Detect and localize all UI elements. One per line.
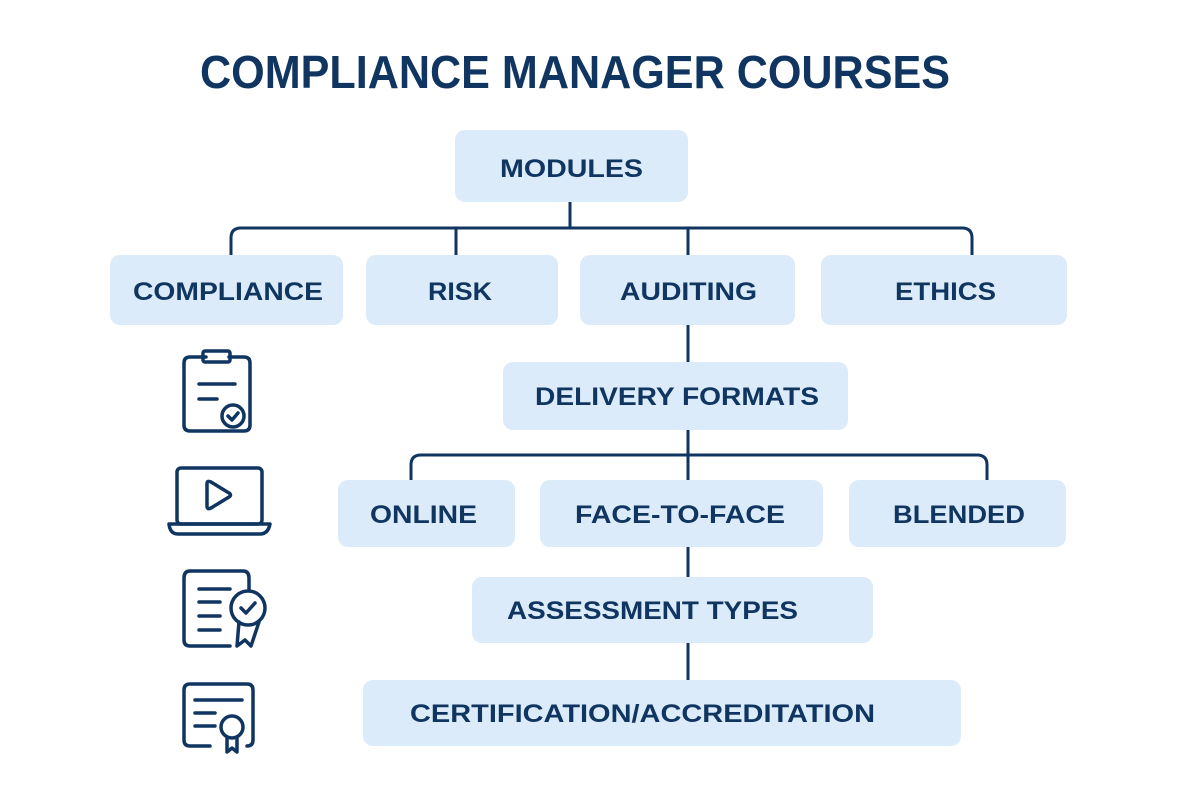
icon: clipboard xyxy=(184,351,250,431)
box: certification xyxy=(363,680,961,746)
box: ethics: ETHICS xyxy=(895,278,996,306)
icon: certificate xyxy=(184,684,253,752)
box: face-to-face xyxy=(540,480,823,547)
box: delivery formats: DELIVERY FORMATS xyxy=(535,383,819,411)
box: assessment types: ASSESSMENT TYPES xyxy=(507,597,798,625)
box: auditing xyxy=(580,255,795,325)
box: compliance xyxy=(110,255,343,325)
box: ethics xyxy=(821,255,1067,325)
box: online: ONLINE xyxy=(370,501,477,529)
connectors xyxy=(231,202,987,680)
box: modules: MODULES xyxy=(500,155,643,183)
box: online xyxy=(338,480,515,547)
box: auditing: AUDITING xyxy=(620,278,757,306)
box: face-to-face: FACE-TO-FACE xyxy=(575,501,785,529)
box: blended xyxy=(849,480,1066,547)
box: risk: RISK xyxy=(428,278,492,306)
box: delivery formats xyxy=(503,362,848,430)
icon: document with badge xyxy=(184,571,265,646)
box: blended: BLENDED xyxy=(893,501,1025,529)
box: compliance: COMPLIANCE xyxy=(133,278,323,306)
box: certification: CERTIFICATION/ACCREDITATION xyxy=(410,700,875,728)
icon: laptop xyxy=(169,468,270,534)
box: assessment types xyxy=(472,577,873,643)
box: risk xyxy=(366,255,558,325)
title: COMPLIANCE MANAGER COURSES xyxy=(200,46,950,98)
box: modules xyxy=(455,130,688,202)
